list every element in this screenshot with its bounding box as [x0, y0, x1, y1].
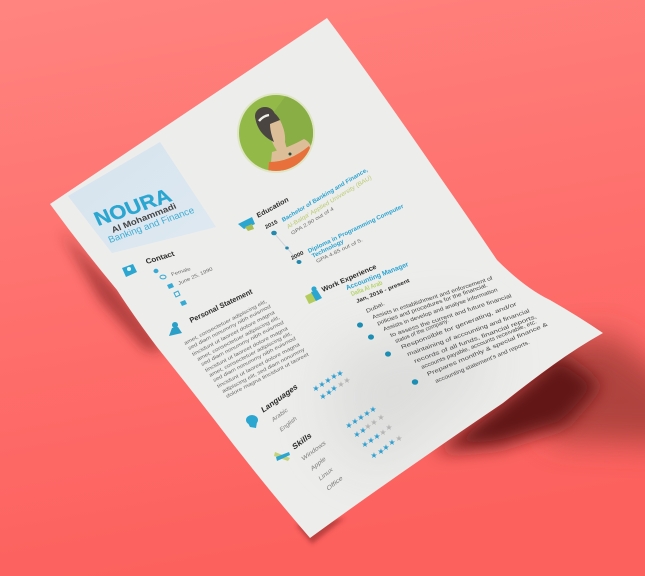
- work description: accounting statement's and reports.: [434, 340, 531, 385]
- skill names: Office: [326, 474, 344, 493]
- work description: to assess the current and future financial: [389, 294, 513, 339]
- language star ratings: ★: [337, 380, 345, 389]
- contact details: Female: [170, 266, 192, 278]
- skill star ratings: ★: [373, 432, 381, 441]
- skill star ratings: ★: [385, 423, 393, 432]
- statement paragraph: amet, consectetuer adipiscing elit,: [183, 299, 268, 347]
- language names: English: [279, 415, 298, 434]
- work description: Responsible for generating, and/or: [400, 302, 518, 351]
- name heading: NOURA: [91, 185, 175, 230]
- skill star ratings: ★: [364, 422, 372, 431]
- skill star ratings: ★: [395, 434, 403, 443]
- education entry 2015: Bachelor of Banking and Finance,: [281, 167, 369, 224]
- skill names: Linux: [318, 466, 334, 483]
- icon: graduation cap: [238, 217, 255, 231]
- work description: Assists in establishment and enforcement of: [371, 276, 494, 321]
- education entry 2015: [264, 167, 373, 237]
- work experience heading: Work Experience: [320, 262, 378, 294]
- icon: contact card: [122, 264, 137, 277]
- education entry 2015: Al-Balqa' Applied University (BAU): [286, 174, 373, 231]
- education entry 2015: 2015: [264, 219, 280, 231]
- statement paragraph: sed diam nonummy nibh euismod: [200, 320, 285, 368]
- work description: Dubai.: [365, 301, 386, 315]
- statement paragraph: [183, 299, 310, 400]
- work description: Assists in develop and analyse information: [382, 288, 499, 333]
- skill star ratings: ★: [351, 417, 359, 426]
- skill star ratings: ★: [367, 436, 375, 445]
- work description: [365, 276, 549, 385]
- paper sheet: [50, 18, 603, 538]
- work description: accounts payable, accounts receivable, etc.: [420, 319, 538, 371]
- skill star ratings: ★: [370, 418, 378, 427]
- personal statement heading: Personal Statement: [188, 287, 254, 325]
- panel: work experience: [305, 261, 549, 385]
- work description: Prepares monthly & special finance &: [426, 322, 549, 378]
- skills heading: Skills: [291, 430, 313, 452]
- skill star ratings: ★: [377, 413, 385, 422]
- panel: education: [238, 167, 405, 265]
- job title: Accounting Manager: [345, 261, 410, 292]
- skill star ratings: ★: [357, 413, 365, 422]
- icon: person: [169, 322, 182, 336]
- contact details: June 25, 1990: [177, 267, 214, 287]
- contact heading: Contact: [144, 249, 176, 266]
- skill star ratings: ★: [363, 409, 371, 418]
- panel: personal statement: [169, 287, 310, 400]
- work description: maintaining of accounting and financial: [406, 309, 531, 358]
- skill star ratings: ★: [379, 428, 387, 437]
- skill names: Apple: [310, 455, 327, 473]
- panel: languages: [246, 369, 351, 434]
- skill star ratings: ★: [359, 426, 367, 435]
- language star ratings: ★: [324, 376, 332, 385]
- skill star ratings: ★: [361, 440, 369, 449]
- language star ratings: ★: [319, 392, 327, 401]
- employer: Dalla Al Arab: [350, 280, 384, 298]
- work description: policies and procedures for the financial.: [376, 283, 489, 327]
- language star ratings: ★: [330, 384, 338, 393]
- paper shadow: [60, 230, 645, 544]
- language star ratings: [312, 369, 351, 401]
- avatar: [237, 93, 315, 173]
- education heading: Education: [255, 195, 290, 220]
- panel: name block: [68, 142, 216, 253]
- job title: Banking and Finance: [107, 205, 196, 246]
- skill star ratings: ★: [382, 443, 390, 452]
- skill names: [301, 440, 344, 493]
- languages heading: Languages: [260, 382, 299, 415]
- language star ratings: ★: [336, 369, 344, 378]
- statement paragraph: tincidunt ut laoreet dolore magna: [204, 326, 289, 374]
- language star ratings: ★: [330, 372, 338, 381]
- statement paragraph: sed diam nonummy nibh euismod: [212, 336, 297, 384]
- job dates: Jan, 2016 - present: [355, 278, 411, 305]
- language names: [271, 407, 298, 434]
- skill star ratings: ★: [370, 451, 378, 460]
- education entry 2000: Diploma in Programming Computer: [307, 203, 405, 255]
- panel: contact: [122, 249, 214, 306]
- statement paragraph: adipiscing elit, sed diam nonummy: [221, 347, 306, 395]
- statement paragraph: tincidunt ut laoreet dolore magna: [216, 342, 301, 390]
- skill star ratings: ★: [353, 430, 361, 439]
- skill star ratings: ★: [377, 447, 385, 456]
- education entry 2000: 2000: [290, 251, 305, 262]
- education entry 2000: Technology: [311, 238, 345, 260]
- skill star ratings: ★: [345, 421, 353, 430]
- statement paragraph: sed diam nonummy nibh euismod: [187, 304, 272, 352]
- surname: Al Mohammadi: [110, 201, 178, 235]
- education entry 2000: [290, 203, 405, 265]
- work bullets: [357, 322, 418, 385]
- language star ratings: ★: [325, 388, 333, 397]
- work description: records of all funds, financial reports,: [413, 314, 538, 365]
- skill star ratings: [345, 405, 403, 460]
- skill names: Windows: [301, 440, 327, 463]
- language names: Arabic: [271, 407, 289, 424]
- panel: skills: [274, 405, 403, 493]
- skill star ratings: ★: [388, 438, 396, 447]
- statement paragraph: amet, consectetuer adipiscing elit,: [208, 331, 293, 379]
- contact icons: [154, 269, 187, 306]
- education timeline: [271, 231, 302, 264]
- work description: status of the company.: [394, 318, 450, 345]
- icon: languages head: [246, 415, 258, 428]
- icon: work team: [305, 286, 322, 304]
- language star ratings: ★: [343, 376, 351, 385]
- statement paragraph: dolore magna tincidunt ut laoreet: [225, 352, 310, 400]
- language star ratings: ★: [318, 380, 326, 389]
- hair: [255, 107, 280, 142]
- icon: tools: [274, 452, 290, 461]
- statement paragraph: tincidunt ut laoreet dolore magna: [191, 310, 276, 358]
- education entry 2015: GPA 2.90 out of 4: [290, 206, 335, 237]
- education entry 2000: GPA 4.85 out of 5.: [315, 238, 364, 265]
- skill star ratings: ★: [369, 405, 377, 414]
- language star ratings: ★: [312, 384, 320, 393]
- statement paragraph: amet, consectetuer adipiscing elit,: [196, 315, 281, 363]
